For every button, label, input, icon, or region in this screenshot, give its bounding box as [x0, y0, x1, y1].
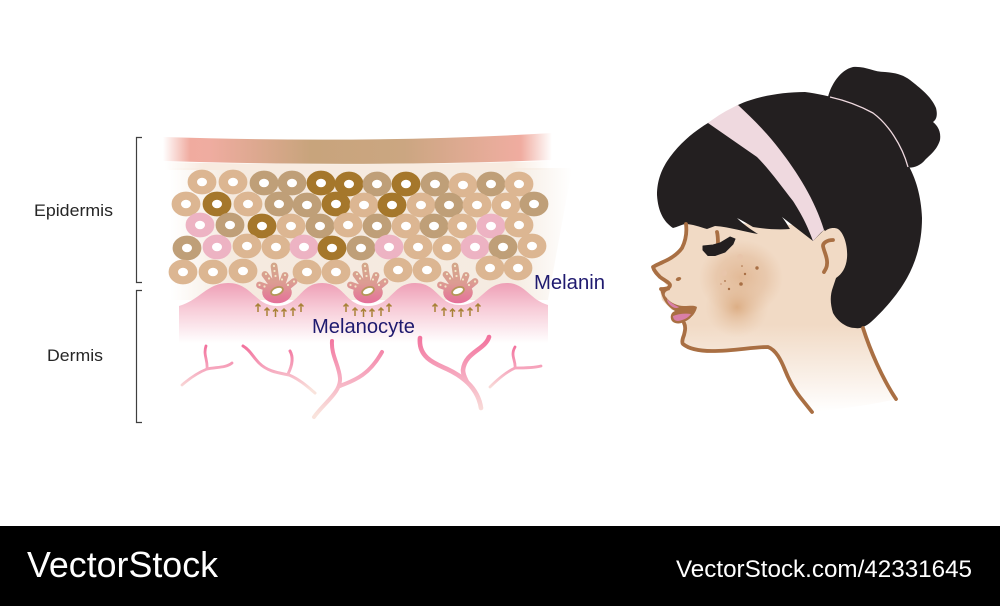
face and neck skin: [653, 222, 897, 412]
footer bar: [0, 526, 1000, 606]
cream band below surface: [165, 161, 550, 170]
melanin arrows 2: [344, 304, 392, 317]
stratum corneum band: [163, 133, 552, 164]
nostril: [675, 276, 682, 282]
blood vessel 1: [182, 346, 232, 385]
eyebrow mark: [717, 232, 718, 244]
melanin arrows 1: [256, 304, 304, 317]
epidermis background: [170, 168, 572, 300]
footer image id: VectorStock.com/42331645: [676, 556, 972, 583]
blood vessel 4: [420, 337, 489, 408]
woman profile: [653, 67, 940, 412]
eyelashes: [703, 237, 735, 256]
lower cheek blemish: [705, 277, 769, 337]
cheek pigmentation: [699, 240, 783, 316]
hair: [657, 92, 922, 328]
bracket: dermis: [136, 290, 142, 422]
blood vessel 2: [243, 346, 315, 393]
jaw outline: [682, 323, 812, 412]
ear: [824, 228, 847, 281]
label: Epidermis: Epidermis: [34, 202, 113, 220]
freckles: [720, 254, 759, 290]
dermis: [179, 283, 548, 343]
label: Melanocyte: Melanocyte: [312, 316, 415, 338]
lips: [660, 287, 697, 323]
melanin arrows 3: [432, 304, 480, 317]
blood vessel 3: [314, 341, 382, 417]
headband: [708, 105, 824, 241]
melanocyte 2: [349, 265, 386, 303]
hair strand highlight: [830, 97, 908, 167]
bracket: epidermis: [136, 138, 142, 282]
nape outline: [863, 328, 896, 399]
hair bun: [828, 67, 940, 168]
label: Melanin: Melanin: [534, 272, 605, 294]
face outline: [653, 224, 686, 289]
melanocyte 3: [439, 265, 476, 303]
blood vessel 5: [490, 347, 541, 387]
skin cells: [173, 174, 544, 280]
label: Dermis: Dermis: [47, 347, 103, 365]
footer logo: VectorStock: [27, 544, 219, 585]
ear inner line: [823, 240, 833, 272]
melanocyte 1: [258, 265, 295, 303]
